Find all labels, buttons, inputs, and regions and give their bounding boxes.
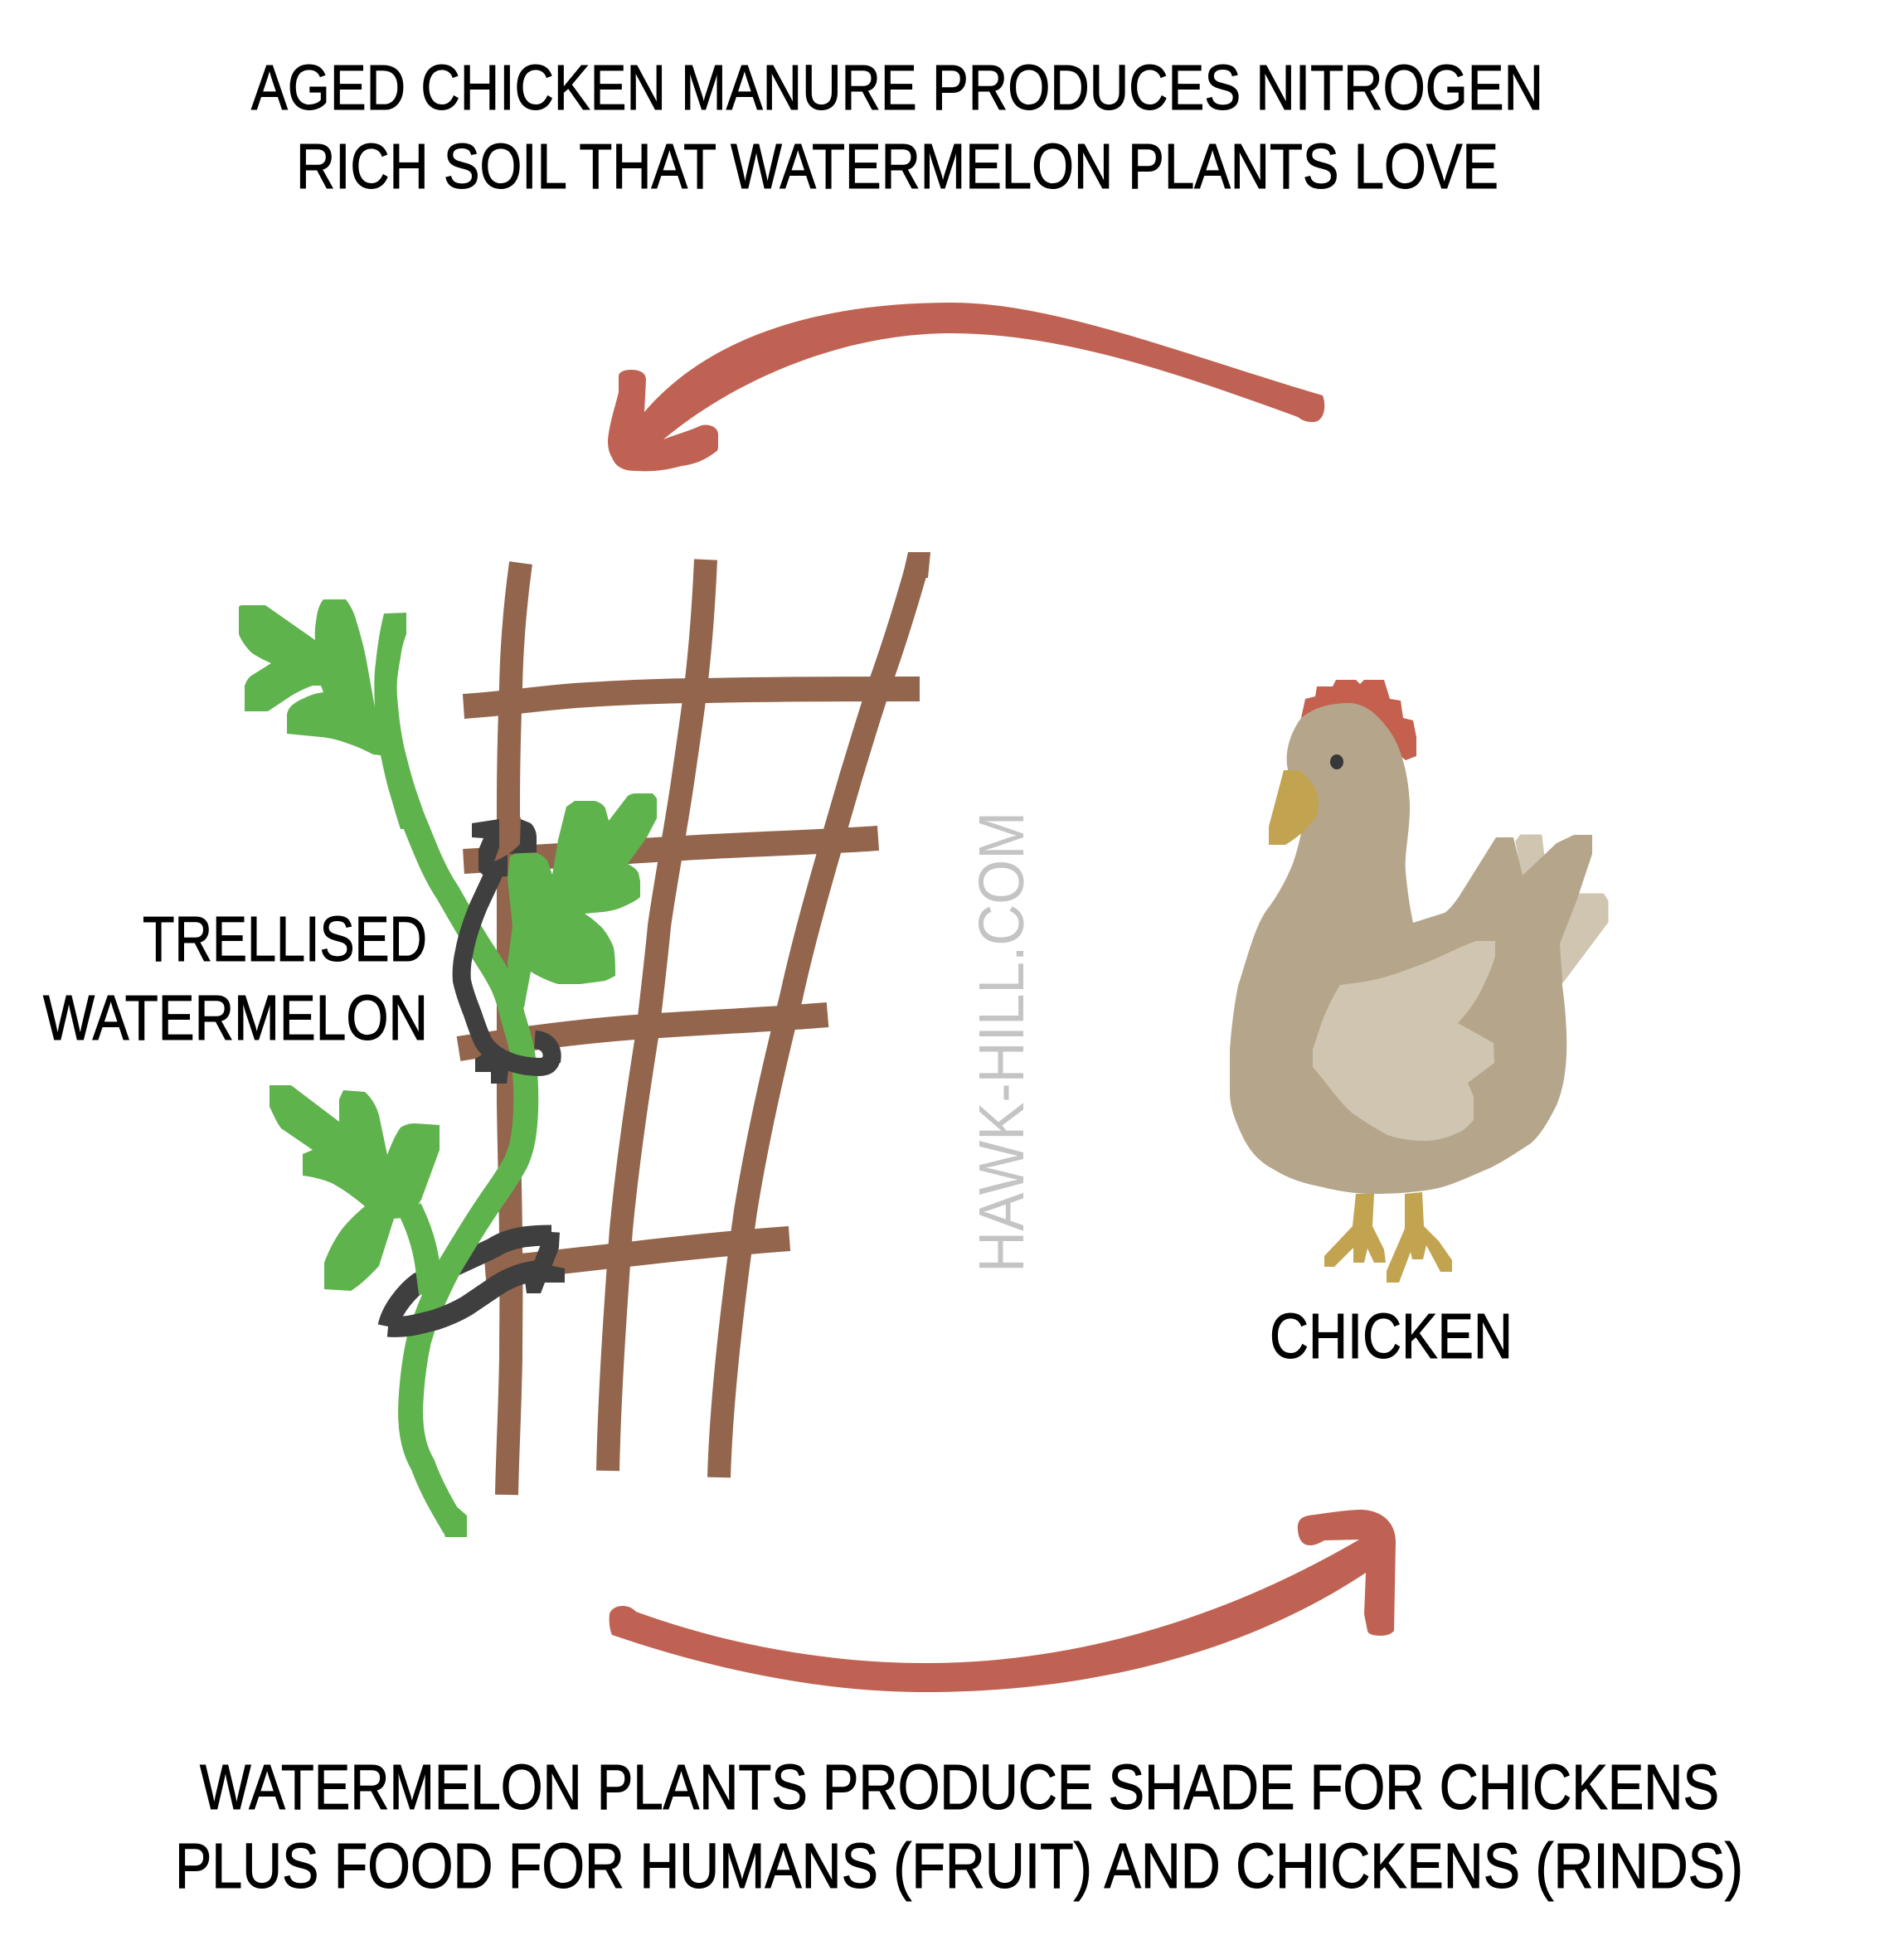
label: trellised watermelon: TRELLISED [143, 904, 427, 975]
arrow: watermelon to chicken [610, 1510, 1396, 1692]
vine [410, 817, 526, 1527]
wing [1313, 941, 1495, 1141]
leaf and upper stem: top [239, 599, 430, 829]
comb [1301, 680, 1416, 760]
label: trellised watermelon [43, 904, 428, 1054]
wire tie back strands [388, 1040, 552, 1326]
body [1230, 703, 1592, 1194]
leaf: lower [270, 1085, 440, 1291]
label: chicken: CHICKEN [1270, 1301, 1513, 1372]
beak [1269, 770, 1319, 845]
heading: manure benefit: AGED CHICKEN MANURE PRODUCES NITROGEN [251, 52, 1543, 124]
heading: manure benefit [251, 52, 1543, 202]
trellised watermelon plant [43, 552, 930, 1537]
label: trellised watermelon: WATERMELON [43, 982, 428, 1054]
legs and feet [1324, 1192, 1452, 1283]
heading: manure benefit: RICH SOIL THAT WATERMELON PLANTS LOVE [296, 131, 1498, 202]
vine base [437, 1505, 467, 1537]
wire tie front strands [388, 817, 565, 1326]
trellis [459, 552, 930, 1495]
arrow: chicken to watermelon [608, 303, 1324, 471]
caption: watermelon benefit [175, 1752, 1743, 1902]
chicken [1230, 680, 1607, 1283]
tail feathers [1517, 836, 1607, 982]
watermark: hawk-hill.com: HAWK-HILL.COM [966, 812, 1037, 1273]
leaf: middle [508, 793, 657, 1009]
eye [1330, 754, 1343, 769]
